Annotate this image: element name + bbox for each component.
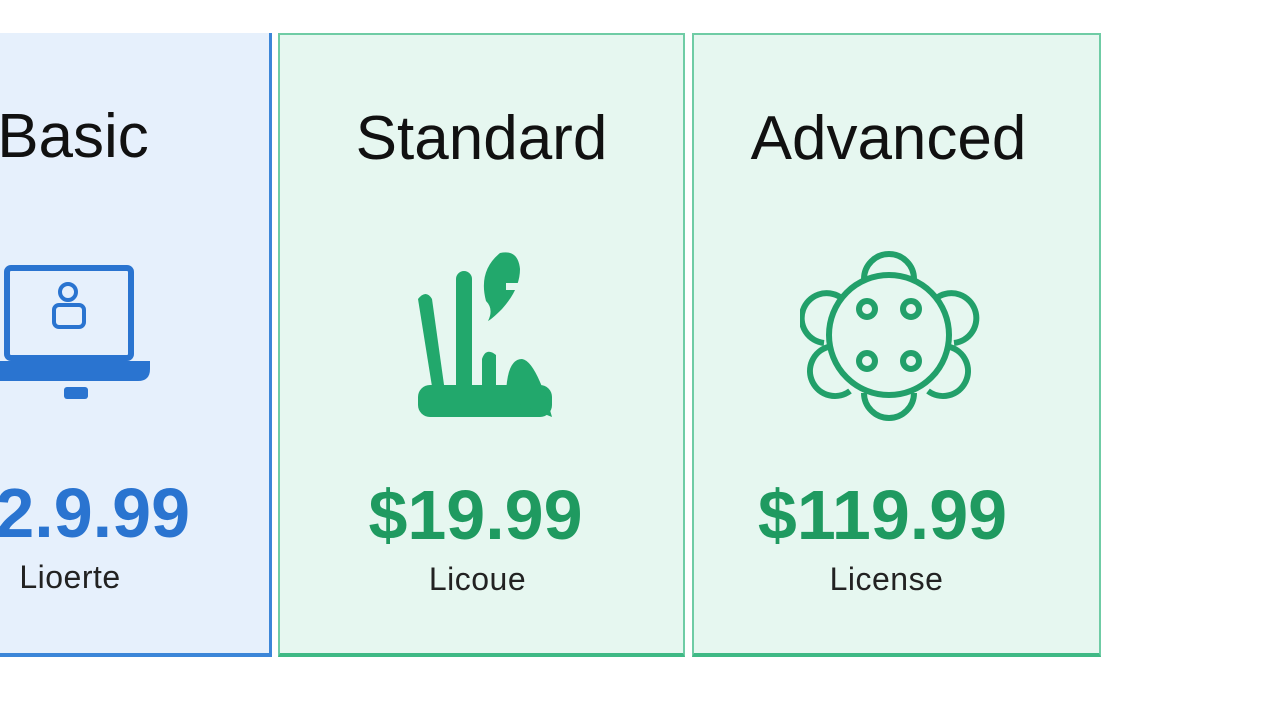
label: basic license: Lioerte xyxy=(19,559,121,595)
icon: laptop xyxy=(0,265,150,399)
icon: flower xyxy=(800,251,980,421)
heading: advanced: Advanced xyxy=(751,104,1026,173)
panel: advanced xyxy=(692,33,1101,657)
price: standard: $19.99 xyxy=(368,476,583,554)
panel: basic xyxy=(0,33,272,657)
label: standard license: Licoue xyxy=(429,561,526,597)
label: advanced license: License xyxy=(830,561,943,597)
heading: standard: Standard xyxy=(356,104,607,173)
heading: basic: Basic xyxy=(0,102,149,171)
price: advanced: $119.99 xyxy=(758,476,1007,554)
panel: standard xyxy=(278,33,685,657)
icon: plant xyxy=(418,252,552,417)
